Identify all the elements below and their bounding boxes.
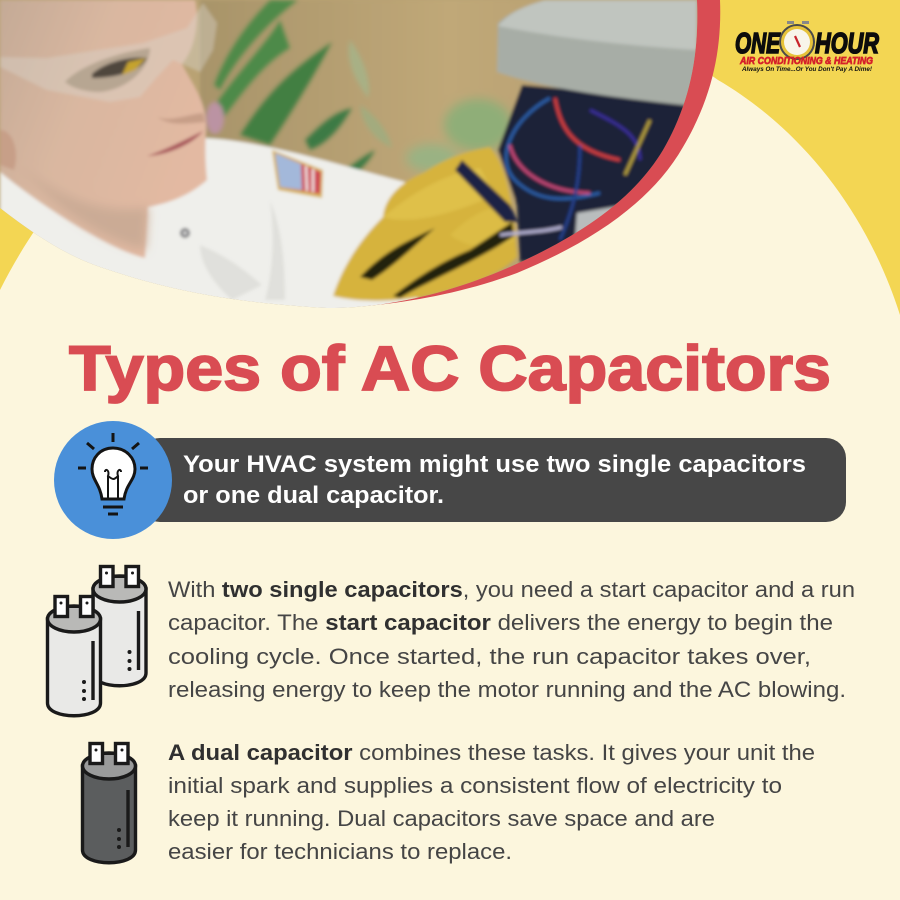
logo subtitle: AIR CONDITIONING & HEATING [739,55,873,67]
paragraph: two single capacitors: cooling cycle. Once started, the run capacitor takes over, [168,644,811,669]
paragraph: two single capacitors: releasing energy to keep the motor running and the AC blowing. [168,677,846,702]
logo wordmark: HOUR [815,28,879,60]
front capacitor [48,596,100,716]
ear shadow and nose [0,113,205,170]
unit base [572,203,616,235]
logo wordmark: ONE [735,28,781,60]
shrub [406,99,512,172]
paragraph: dual capacitor [168,740,815,864]
icon: light bulb [54,421,172,539]
paragraph: two single capacitors: capacitor. The start capacitor delivers the energy to begin the [168,610,833,635]
shirt folds [180,200,285,300]
logo stopwatch [780,21,814,59]
icon: dual capacitor [82,744,136,863]
stubble and jaw shading [45,188,154,252]
rear capacitor [93,566,146,686]
paragraph: dual capacitor: initial spark and supplies a consistent flow of electricity to [168,773,782,798]
banner text: or one dual capacitor. [183,482,444,509]
paragraph: dual capacitor: easier for technicians to replace. [168,839,512,864]
banner text [183,451,806,509]
American flag patch [272,150,323,198]
AC unit lid [496,13,696,108]
paragraph: dual capacitor: keep it running. Dual capacitors save space and are [168,806,715,831]
safety glasses [0,3,217,102]
photo: technician working on an AC unit [0,0,720,320]
head and neck [0,0,207,258]
shirt [0,138,420,320]
fence background [200,0,700,200]
title: Types of AC Capacitors [69,334,831,404]
paragraph: two single capacitors [168,577,855,702]
logo tagline: Always On Time...Or You Don't Pay A Dime! [741,67,872,73]
logo: One Hour Air Conditioning & Heating [735,21,879,73]
AC unit interior [498,85,697,262]
paragraph: dual capacitor: A dual capacitor combines these tasks. It gives your unit the [168,740,815,765]
wires [500,98,650,240]
logo wordmark [735,28,879,60]
red photo border [327,0,720,308]
lid top surface [498,0,697,50]
paragraph: two single capacitors: With two single capacitors , you need a start capacitor and a run [168,577,855,602]
icon: two single capacitors [48,566,146,716]
tip banner [140,438,846,522]
banner bar [140,438,846,522]
mouth [147,131,203,156]
plant leaves [206,0,392,185]
banner text: Your HVAC system might use two single capacitors [183,451,806,478]
leather glove [333,147,518,301]
